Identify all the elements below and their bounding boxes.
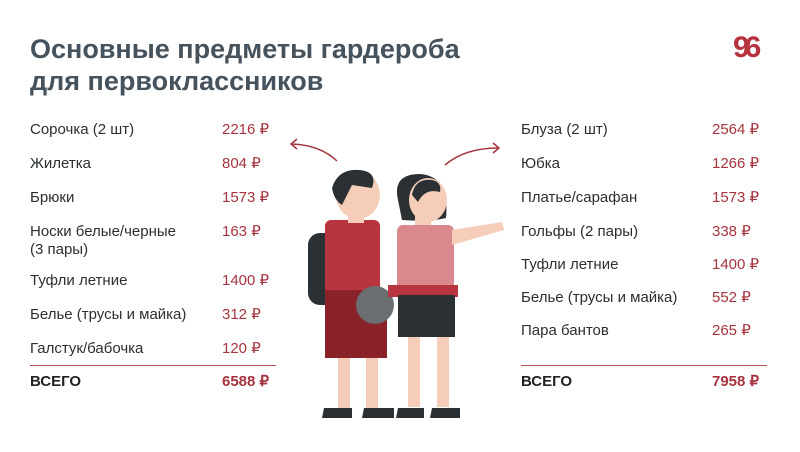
panel: boy list: Носки белые/черные <box>30 223 176 240</box>
panel: boy list: 312 ₽ <box>222 306 261 323</box>
panel: girl list: 1266 ₽ <box>712 155 759 172</box>
panel: boy list: Галстук/бабочка <box>30 340 143 357</box>
panel: boy list: 6588 ₽ <box>222 373 269 390</box>
panel: boy list: Брюки <box>30 189 74 206</box>
panel: girl list: Пара бантов <box>521 322 609 339</box>
panel: boy list: Туфли летние <box>30 272 127 289</box>
panel: boy list: 163 ₽ <box>222 223 261 240</box>
panel: boy list <box>30 121 276 390</box>
panel: girl list: 552 ₽ <box>712 289 751 306</box>
panel: girl list: Гольфы (2 пары) <box>521 223 638 240</box>
title <box>30 34 460 96</box>
panel: girl list: 1573 ₽ <box>712 189 759 206</box>
panel: boy list: ВСЕГО <box>30 373 81 390</box>
panel: boy list: (3 пары) <box>30 241 88 258</box>
logo: 96 <box>733 31 756 64</box>
panel: boy list: Сорочка (2 шт) <box>30 121 134 138</box>
panel: girl list: 265 ₽ <box>712 322 751 339</box>
panel: girl list: Белье (трусы и майка) <box>521 289 677 306</box>
panel: girl list: ВСЕГО <box>521 373 572 390</box>
illustration: children <box>290 138 504 418</box>
boy <box>308 170 394 418</box>
panel: girl list: Платье/сарафан <box>521 189 637 206</box>
title: Основные предметы гардероба <box>30 34 460 64</box>
girl <box>388 174 504 418</box>
panel: boy list: Белье (трусы и майка) <box>30 306 186 323</box>
arrow: left <box>291 139 337 161</box>
panel: girl list: Блуза (2 шт) <box>521 121 608 138</box>
panel: boy list: 804 ₽ <box>222 155 261 172</box>
title: для первоклассников <box>30 66 323 96</box>
panel: boy list: Жилетка <box>30 155 91 172</box>
panel: girl list: Туфли летние <box>521 256 618 273</box>
arrow: right <box>445 143 499 165</box>
panel: girl list: 338 ₽ <box>712 223 751 240</box>
panel: girl list <box>521 121 767 390</box>
panel: boy list: 120 ₽ <box>222 340 261 357</box>
panel: girl list: 2564 ₽ <box>712 121 759 138</box>
panel: boy list: 1573 ₽ <box>222 189 269 206</box>
panel: girl list: 7958 ₽ <box>712 373 759 390</box>
panel: girl list: 1400 ₽ <box>712 256 759 273</box>
panel: boy list: 1400 ₽ <box>222 272 269 289</box>
panel: girl list: Юбка <box>521 155 560 172</box>
panel: boy list: 2216 ₽ <box>222 121 269 138</box>
